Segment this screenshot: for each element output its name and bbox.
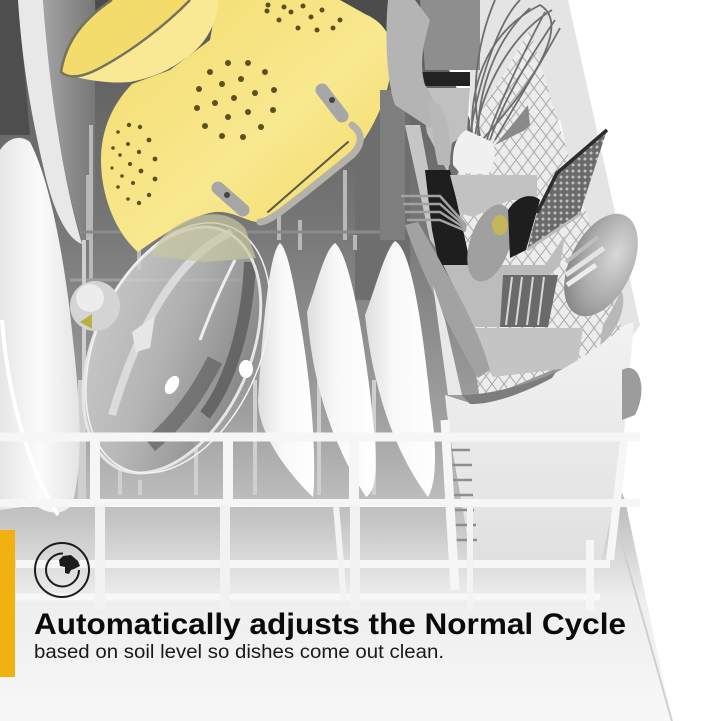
black utensil handle	[425, 170, 470, 283]
silverware basket front	[445, 322, 641, 565]
divider slab one	[420, 88, 470, 173]
divider slab three	[443, 235, 565, 327]
divider slab four	[470, 328, 583, 377]
whisk	[470, 0, 560, 142]
colander	[61, 0, 392, 252]
colander handle	[218, 90, 360, 222]
plate: back left	[18, 0, 82, 244]
slotted spoon	[549, 202, 653, 345]
whisk handle	[453, 130, 495, 174]
subheading: based on soil level so dishes come out clean.	[34, 642, 444, 663]
ladle spoon	[386, 0, 436, 128]
whisk ball	[459, 199, 521, 287]
plate two	[307, 243, 376, 497]
plate three	[365, 241, 435, 497]
colander top bowl	[61, 0, 218, 83]
spatula	[495, 105, 530, 145]
left rack wall	[380, 90, 405, 240]
plate one	[258, 243, 314, 497]
long utensil	[405, 222, 490, 378]
divider slab two	[450, 175, 537, 217]
soil sensor icon	[35, 543, 89, 597]
colander rim	[61, 0, 190, 76]
yellow accent bar	[0, 530, 15, 677]
left plate	[0, 138, 80, 513]
heading: Automatically adjusts the Normal Cycle	[34, 608, 626, 641]
fork	[401, 196, 466, 231]
colander holes	[110, 2, 343, 205]
dish rack wires	[0, 420, 640, 610]
utensil background	[380, 0, 653, 400]
upper rack back wires	[70, 125, 400, 500]
top utensils	[420, 0, 480, 70]
white basket walls	[470, 0, 640, 340]
glass lid	[48, 194, 307, 502]
lower tines	[500, 275, 558, 327]
black handle	[508, 196, 540, 258]
grater	[527, 130, 607, 250]
lid knob	[70, 281, 120, 331]
wire basket mesh	[450, 30, 625, 400]
colander body	[101, 0, 392, 252]
basket left wall lower	[433, 285, 462, 395]
